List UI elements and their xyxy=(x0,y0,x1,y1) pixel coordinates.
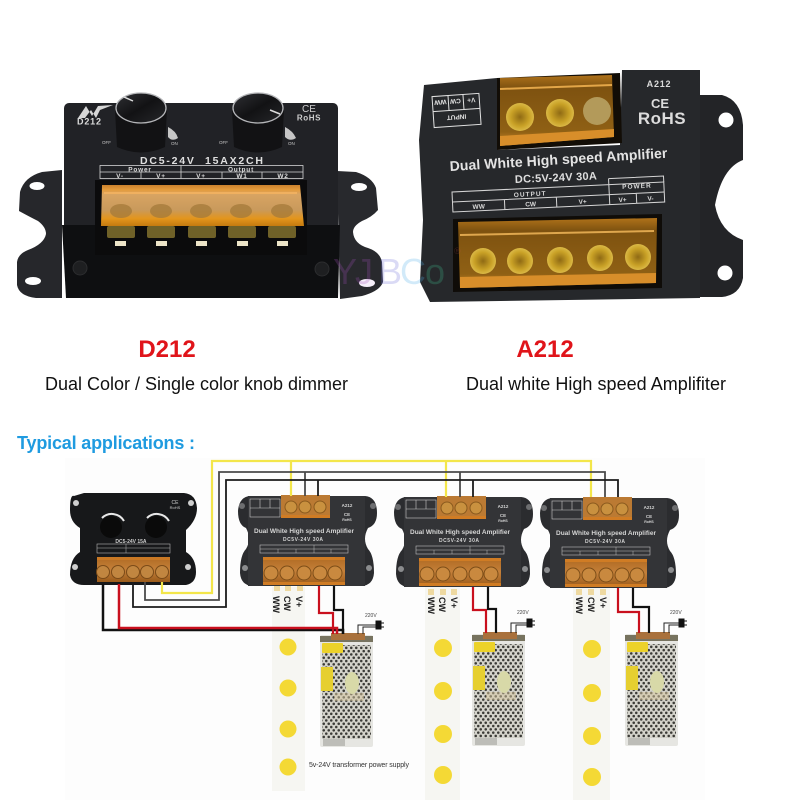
amplifier unit 1: DC5V-24V 30A xyxy=(283,537,323,543)
right mounting ear xyxy=(698,95,743,297)
heading: D212: D212 xyxy=(138,336,196,363)
amplifier unit 3: DC5V-24V 30A xyxy=(585,539,625,545)
lower terminal block xyxy=(453,214,662,292)
amplifier unit 2: DC5V-24V 30A xyxy=(439,538,479,544)
terminal label table: Power xyxy=(128,166,152,174)
LED strip 1 xyxy=(271,585,305,791)
amplifier 1 power wires xyxy=(319,586,343,634)
input label table: INPUT xyxy=(446,112,466,121)
LED strip 1: WW xyxy=(271,596,281,613)
left knob: OFF xyxy=(102,140,111,145)
terminal label table xyxy=(100,166,303,180)
output and power label table: WW xyxy=(472,203,486,211)
input label table: V+ xyxy=(467,96,476,103)
power supply 2 xyxy=(472,632,525,746)
A212 model and compliance marks: RoHS xyxy=(638,109,686,128)
CE RoHS mark: RoHS xyxy=(297,114,321,122)
amplifier unit 2: A212 xyxy=(498,504,509,509)
grey signal wire xyxy=(145,472,605,600)
output and power label table: OUTPUT xyxy=(514,191,547,199)
watermark: ® xyxy=(454,246,461,256)
LED strip 1: V+ xyxy=(294,596,304,607)
amplifier unit 2: RoHS xyxy=(498,519,508,523)
power supply caption: 5v-24V transformer power supply xyxy=(309,762,410,769)
LED strip 3: WW xyxy=(574,597,584,614)
watermark xyxy=(333,246,461,292)
heading: A212: A212 xyxy=(516,336,574,363)
amplifier unit 2: Dual White High speed Amplifier xyxy=(410,529,510,536)
small D212 dimmer: CE xyxy=(172,500,179,506)
output and power label table: V- xyxy=(647,196,654,203)
amplifier unit 2: CE xyxy=(500,513,506,518)
right knob: ON xyxy=(288,141,295,146)
brand logo and model xyxy=(77,105,113,126)
output and power label table: V+ xyxy=(578,199,587,206)
yellow signal wire xyxy=(162,461,591,593)
LED strip 2: V+ xyxy=(449,597,459,608)
amplifier unit 3: Dual White High speed Amplifier xyxy=(556,530,656,537)
watermark: o xyxy=(425,251,445,292)
watermark: B xyxy=(378,251,402,292)
input label table: CW xyxy=(449,97,461,104)
CE RoHS mark xyxy=(297,104,321,122)
mains plug 3 with 220V label xyxy=(664,610,687,633)
CE RoHS mark: CE xyxy=(302,104,316,115)
front face xyxy=(62,225,340,298)
right mounting ear xyxy=(337,171,383,299)
mains plug 1 with 220V label xyxy=(358,613,384,634)
D212 description: Dual Color / Single color knob dimmer xyxy=(45,374,348,394)
mains plug 2 with 220V label xyxy=(511,610,535,633)
power supply 3 xyxy=(625,632,678,746)
power supply 1 xyxy=(320,633,373,747)
mains plug 1 with 220V label: 220V xyxy=(365,613,377,619)
amplifier 2 power wires xyxy=(473,587,496,633)
input label table: WW xyxy=(433,98,447,106)
left knob xyxy=(102,93,178,152)
terminal label table: Output xyxy=(228,166,254,174)
LED strip 1: CW xyxy=(282,596,292,611)
upper terminal block xyxy=(497,73,622,150)
rating text: DC:5V-24V 30A xyxy=(515,170,597,186)
amplifier unit 1: RoHS xyxy=(342,518,352,522)
amplifier unit 3: CE xyxy=(646,514,652,519)
mains plug 3 with 220V label: 220V xyxy=(670,610,682,616)
A212 description: Dual white High speed Amplifiter xyxy=(466,374,726,394)
output and power label table: CW xyxy=(525,201,537,209)
amplifier body xyxy=(419,70,700,302)
amplifier unit 1 xyxy=(238,495,377,586)
right knob xyxy=(219,93,296,152)
small D212 dimmer: RoHS xyxy=(170,505,181,510)
terminal label table: V- xyxy=(116,173,124,180)
input label table xyxy=(432,93,481,128)
terminal label table: V+ xyxy=(196,173,206,180)
diagram backdrop xyxy=(65,458,705,800)
left mounting ear xyxy=(17,170,62,298)
dimmer power wires xyxy=(103,584,343,634)
LED strip 3: CW xyxy=(586,597,596,612)
watermark: YJ xyxy=(333,251,373,292)
LED strip 2 xyxy=(425,587,460,800)
terminal block with amber cover xyxy=(95,180,307,255)
amplifier unit 3: RoHS xyxy=(644,520,654,524)
product: A212 amplifier xyxy=(419,70,743,302)
A212 model and compliance marks xyxy=(638,79,686,128)
amplifier unit 1: A212 xyxy=(342,503,353,508)
amplifier 3 power wires xyxy=(618,588,649,633)
black signal wire xyxy=(133,480,618,607)
A212 model and compliance marks: A212 xyxy=(647,79,671,89)
amplifier unit 1: Dual White High speed Amplifier xyxy=(254,528,354,535)
brand logo and model: D212 xyxy=(77,116,101,126)
output and power label table: V+ xyxy=(618,197,627,204)
amplifier name: Dual White High speed Amplifier xyxy=(449,145,668,174)
output and power label table: POWER xyxy=(622,183,652,191)
amplifier unit 3 xyxy=(540,497,679,588)
product: D212 knob dimmer xyxy=(17,93,383,299)
LED strip 3: V+ xyxy=(598,597,608,608)
heading: typical applications: Typical applications : xyxy=(17,433,195,453)
small D212 dimmer: DC5-24V 15A xyxy=(115,539,147,545)
right knob: OFF xyxy=(219,140,228,145)
left knob: ON xyxy=(171,141,178,146)
small D212 dimmer xyxy=(70,493,197,585)
wiring diagram xyxy=(65,458,705,800)
terminal label table: W2 xyxy=(277,173,289,180)
output and power label table xyxy=(452,176,665,212)
A212 model and compliance marks: CE xyxy=(651,96,669,111)
top plate xyxy=(64,103,338,231)
mains plug 2 with 220V label: 220V xyxy=(517,610,529,616)
terminal label table: V+ xyxy=(156,173,166,180)
watermark: C xyxy=(400,251,426,292)
amplifier unit 2 xyxy=(394,496,533,587)
amplifier unit 3: A212 xyxy=(644,505,655,510)
amplifier unit 1: CE xyxy=(344,512,350,517)
LED strip 2: WW xyxy=(426,597,436,614)
LED strip 2: CW xyxy=(437,597,447,612)
terminal label table: W1 xyxy=(236,173,248,180)
LED strip 3 xyxy=(573,587,610,800)
rating text: DC5-24V 15AX2CH xyxy=(140,155,263,167)
